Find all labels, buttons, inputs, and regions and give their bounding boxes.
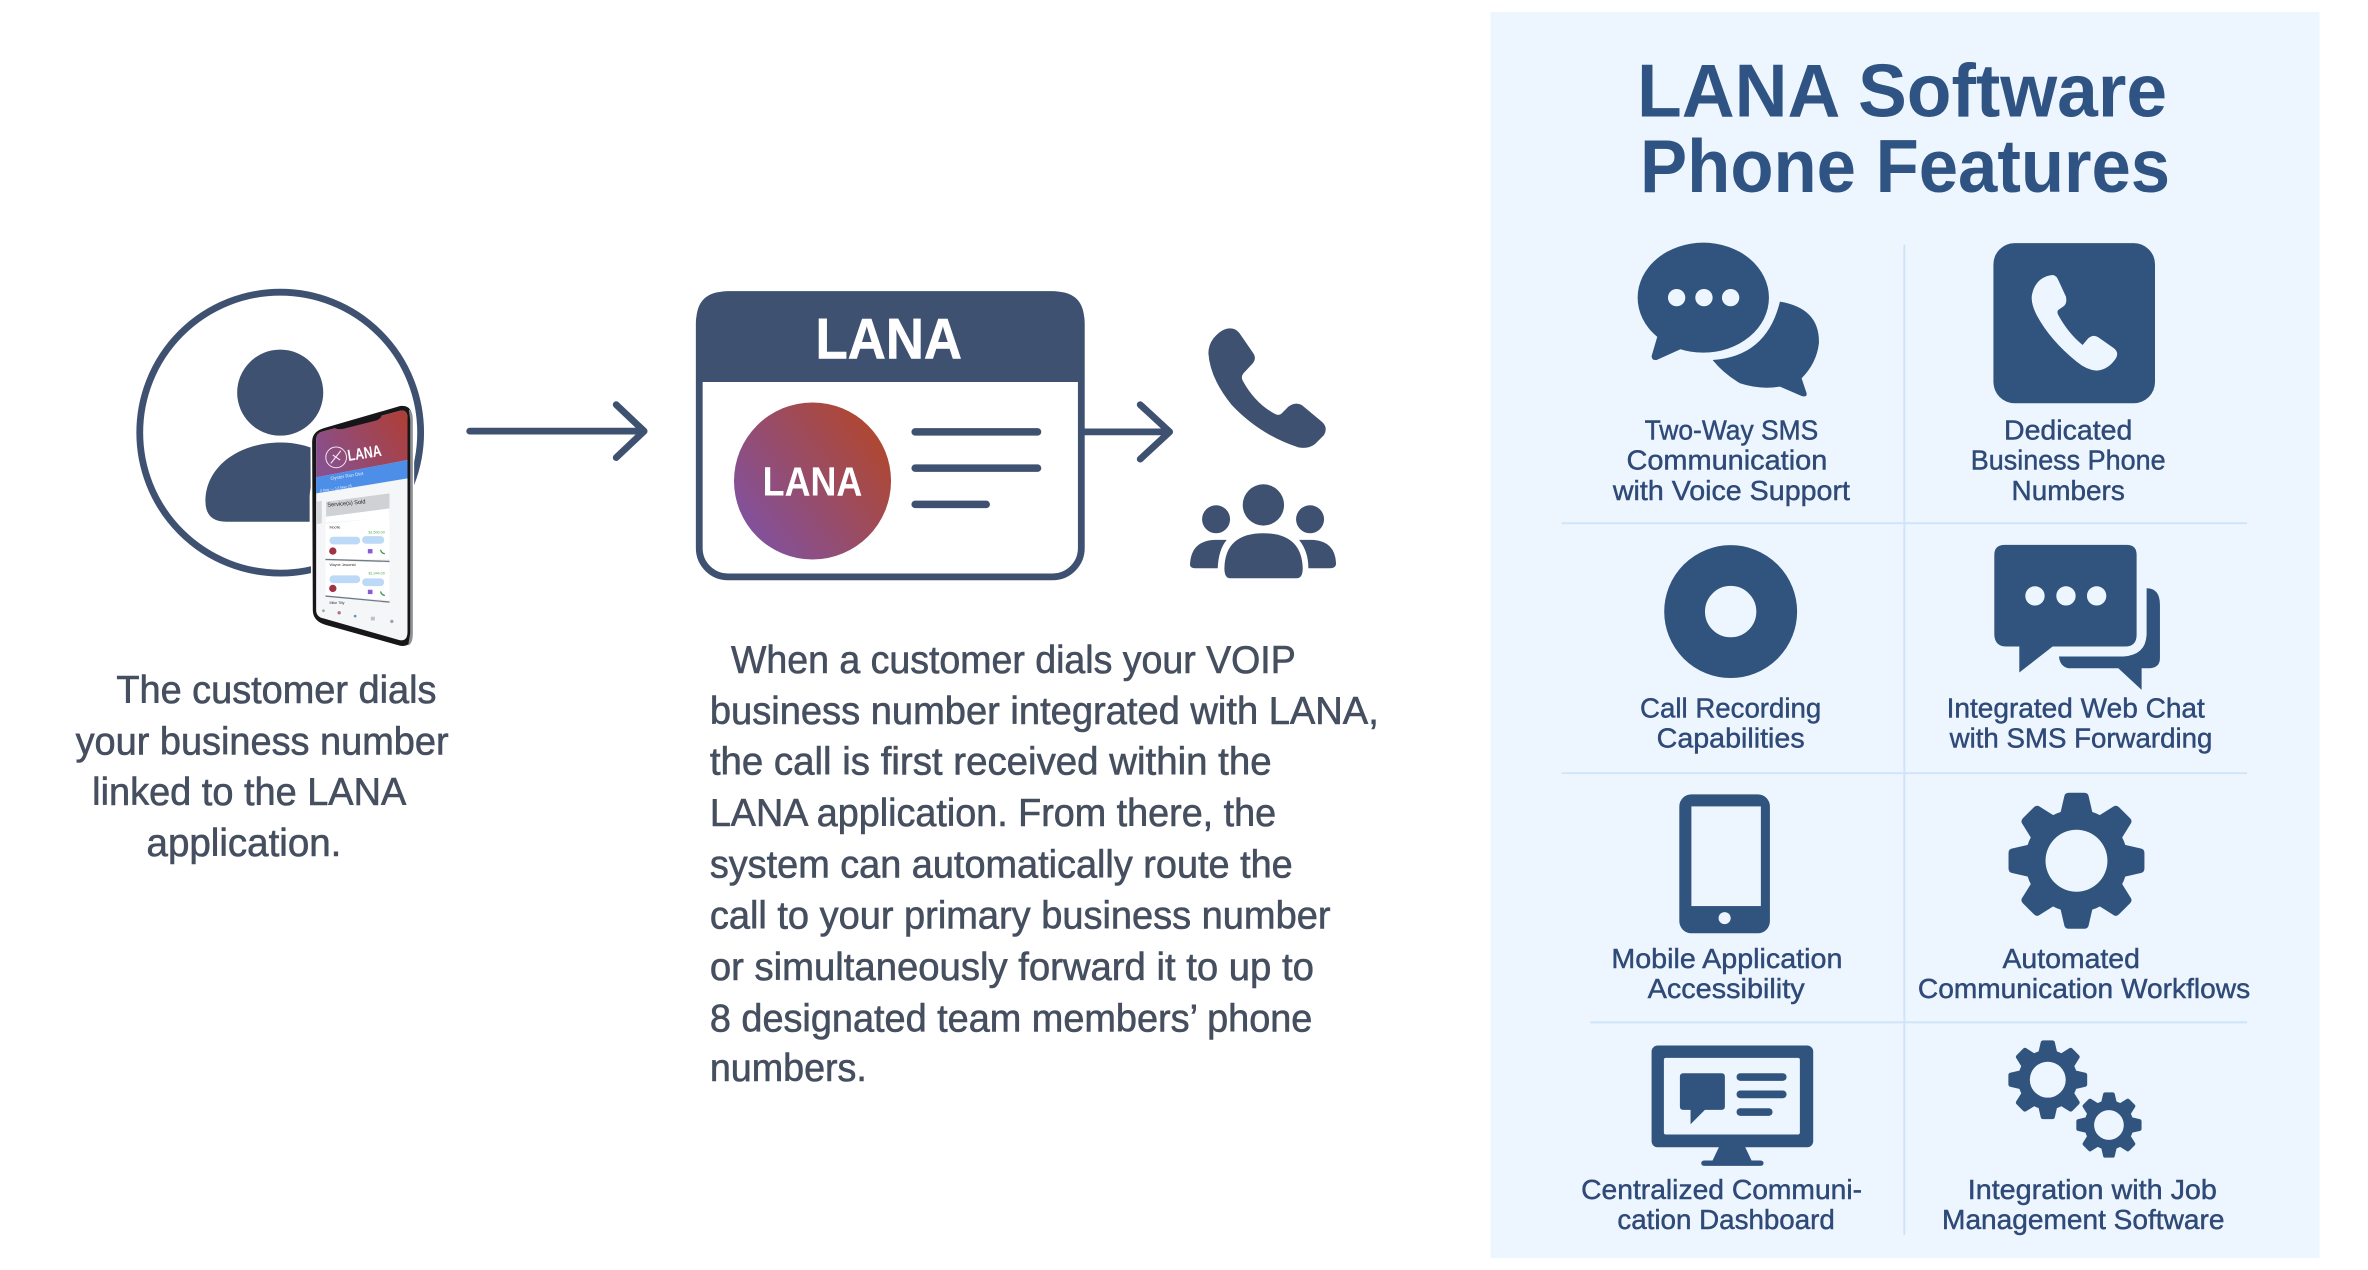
placeholder text lines xyxy=(915,432,1038,504)
label: with Voice Support xyxy=(1612,475,1850,506)
feature: dedicated phone numbers xyxy=(1971,243,2166,506)
panel: LANA application window xyxy=(696,291,1084,577)
arrow: LANA to phone and team xyxy=(1084,405,1170,459)
window header xyxy=(696,291,1084,382)
label xyxy=(1581,1174,1862,1235)
feature: mobile app xyxy=(1611,794,1842,1004)
icon: smartphone showing LANA app: LANA xyxy=(346,443,383,465)
window title: LANA xyxy=(816,308,962,372)
label xyxy=(1942,1174,2224,1235)
icon: gear xyxy=(2009,793,2144,929)
label: Integrated Web Chat xyxy=(1947,692,2205,723)
text block: customer description: application. xyxy=(147,822,341,865)
text block: customer description xyxy=(76,669,449,865)
text block: call routing description: numbers. xyxy=(710,1047,867,1090)
label: Integration with Job xyxy=(1968,1174,2217,1205)
feature: automated workflows xyxy=(1918,793,2250,1004)
icon: smartphone showing LANA app: $1,500.00 xyxy=(368,530,385,534)
icon: customer with phone xyxy=(140,292,421,646)
label: Communication xyxy=(1626,445,1827,476)
label: Automated xyxy=(2002,943,2140,974)
icon: smartphone showing LANA app: Wayne Jaworski xyxy=(329,563,356,567)
icon: paired gears xyxy=(2008,1040,2142,1158)
text block: call routing description: call to your primary business number xyxy=(710,895,1331,938)
label xyxy=(1971,414,2166,506)
icon: smartphone showing LANA app: Mike Tilly xyxy=(329,601,345,605)
icon: customer circle xyxy=(140,292,421,573)
icon: square chat bubbles xyxy=(1994,545,2160,690)
feature: call recording xyxy=(1640,566,1821,754)
feature: two-way SMS xyxy=(1612,243,1850,506)
label: Accessibility xyxy=(1648,973,1805,1004)
label xyxy=(1918,943,2250,1004)
logo circle xyxy=(734,402,891,559)
icon: smartphone showing LANA app: Service(s) Sold xyxy=(327,499,366,509)
label xyxy=(1640,692,1821,754)
text block: call routing description: When a customer dials your VOIP xyxy=(731,639,1296,682)
icon: mobile device xyxy=(1679,794,1770,933)
label: Mobile Application xyxy=(1611,943,1842,974)
text block: call routing description: LANA application. From there, the xyxy=(710,792,1276,835)
arrow: customer to LANA xyxy=(470,405,644,458)
label: Two-Way SMS xyxy=(1645,414,1818,445)
text block: customer description: linked to the LANA xyxy=(92,771,407,814)
heading xyxy=(1637,48,2170,208)
text block: customer description: your business number xyxy=(76,720,449,763)
feature: web chat xyxy=(1947,545,2212,754)
label: Capabilities xyxy=(1657,723,1805,754)
label xyxy=(1947,692,2212,754)
label: Numbers xyxy=(2012,475,2125,506)
label: Call Recording xyxy=(1640,692,1821,723)
text block: call routing description: system can automatically route the xyxy=(710,843,1293,886)
icon: smartphone showing LANA app xyxy=(312,406,413,646)
text block: call routing description xyxy=(710,639,1379,1090)
icon: record disc xyxy=(1685,566,1777,658)
window frame xyxy=(699,294,1081,577)
label xyxy=(1611,943,1842,1004)
text block: customer description: The customer dials xyxy=(116,669,436,712)
label: Dedicated xyxy=(2004,414,2132,445)
icon: chat bubbles xyxy=(1638,243,1819,396)
label: with SMS Forwarding xyxy=(1949,723,2212,754)
panel background xyxy=(1491,12,2320,1258)
icon: smartphone showing LANA app: Moofie xyxy=(329,525,340,529)
icon: customer head xyxy=(237,350,323,436)
icon: phone handset xyxy=(1208,328,1326,448)
feature: job management integration xyxy=(1942,1040,2224,1235)
feature: dashboard xyxy=(1581,1046,1862,1235)
label: Centralized Communi- xyxy=(1581,1174,1862,1205)
icon: phone tile xyxy=(1993,243,2155,403)
label: Business Phone xyxy=(1971,445,2166,476)
label xyxy=(1612,414,1850,506)
logo text: LANA xyxy=(763,458,862,504)
icon: customer body xyxy=(205,442,317,522)
icon: smartphone showing LANA app: Oyster Run Dint xyxy=(330,471,364,481)
text block: call routing description: the call is first received within the xyxy=(710,741,1272,784)
heading: LANA Software xyxy=(1637,48,2167,132)
icon: smartphone showing LANA app: $1,944.00 xyxy=(368,572,385,576)
label: Communication Workflows xyxy=(1918,973,2250,1004)
icon: team members xyxy=(1190,484,1336,578)
text block: call routing description: 8 designated team members’ phone xyxy=(710,997,1312,1040)
text block: call routing description: business number integrated with LANA, xyxy=(710,690,1379,733)
heading: Phone Features xyxy=(1640,124,2170,208)
panel: LANA Software Phone Features xyxy=(1491,12,2320,1258)
label: Management Software xyxy=(1942,1204,2224,1235)
icon: smartphone showing LANA app: 2 Nov — 12 May 25 xyxy=(320,484,352,493)
icon: monitor dashboard xyxy=(1652,1046,1813,1166)
text block: call routing description: or simultaneously forward it to up to xyxy=(710,946,1314,989)
label: cation Dashboard xyxy=(1617,1204,1835,1235)
